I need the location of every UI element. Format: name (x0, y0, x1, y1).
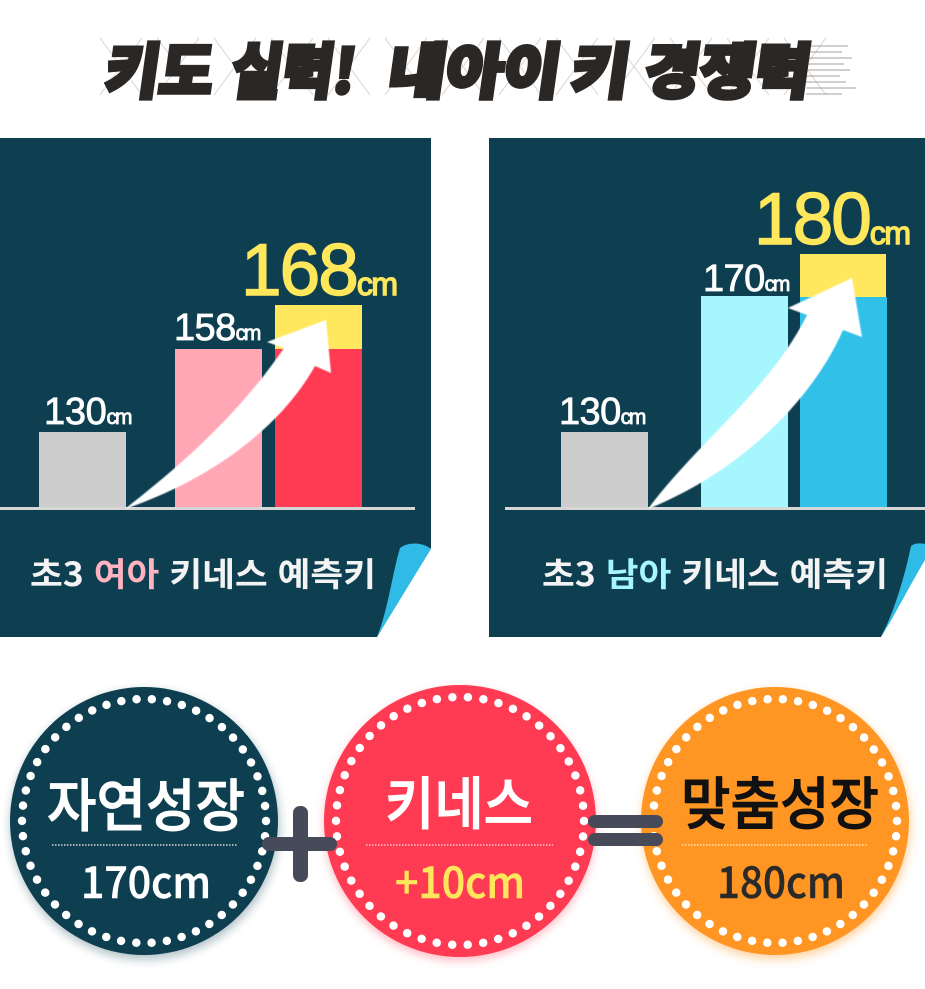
panel background (489, 138, 925, 637)
bar: 158cm (175, 349, 262, 507)
panel: girls chart (0, 138, 431, 637)
label: 170cm: 170cm (703, 258, 790, 300)
label: 130cm: 130cm (44, 391, 132, 433)
title: 내아이 (383, 24, 568, 111)
title (100, 24, 856, 111)
panel background (0, 138, 431, 637)
page curl (377, 544, 431, 637)
label: 130cm: 130cm (559, 391, 646, 433)
caption: 초3 남아 키네스 예측키 (542, 548, 888, 596)
bar: 130cm (561, 432, 648, 507)
title: 경쟁력 (639, 24, 818, 111)
circle: natural growth (10, 687, 279, 959)
label: 180cm: 180cm (754, 179, 909, 260)
bar: 180cm (800, 254, 887, 507)
baseline (0, 507, 415, 510)
value: +10cm (395, 849, 525, 911)
title: 키 (566, 24, 637, 111)
circle: kinesis (324, 685, 596, 960)
arrow (125, 320, 331, 509)
caption: 초3 여아 키네스 예측키 (30, 548, 376, 596)
page curl (881, 543, 925, 637)
label: 158cm: 158cm (174, 307, 261, 349)
value: 170cm (81, 849, 211, 911)
title: 실력! (226, 24, 363, 111)
heading: 키네스 (385, 759, 533, 841)
title: 키도 (100, 24, 221, 111)
icon: plus (262, 806, 337, 882)
circle: customized growth (641, 687, 910, 959)
baseline (505, 507, 925, 510)
arrow (648, 278, 862, 509)
bar: 168cm (275, 305, 362, 507)
heading: 맞춤성장 (681, 759, 879, 841)
label: 168cm: 168cm (241, 230, 396, 311)
bar: 170cm (701, 296, 788, 507)
value: 180cm (717, 849, 845, 911)
bar: 130cm (39, 432, 126, 507)
heading: 자연성장 (47, 761, 245, 843)
icon: equals (588, 815, 663, 846)
panel: boys chart (489, 138, 925, 637)
